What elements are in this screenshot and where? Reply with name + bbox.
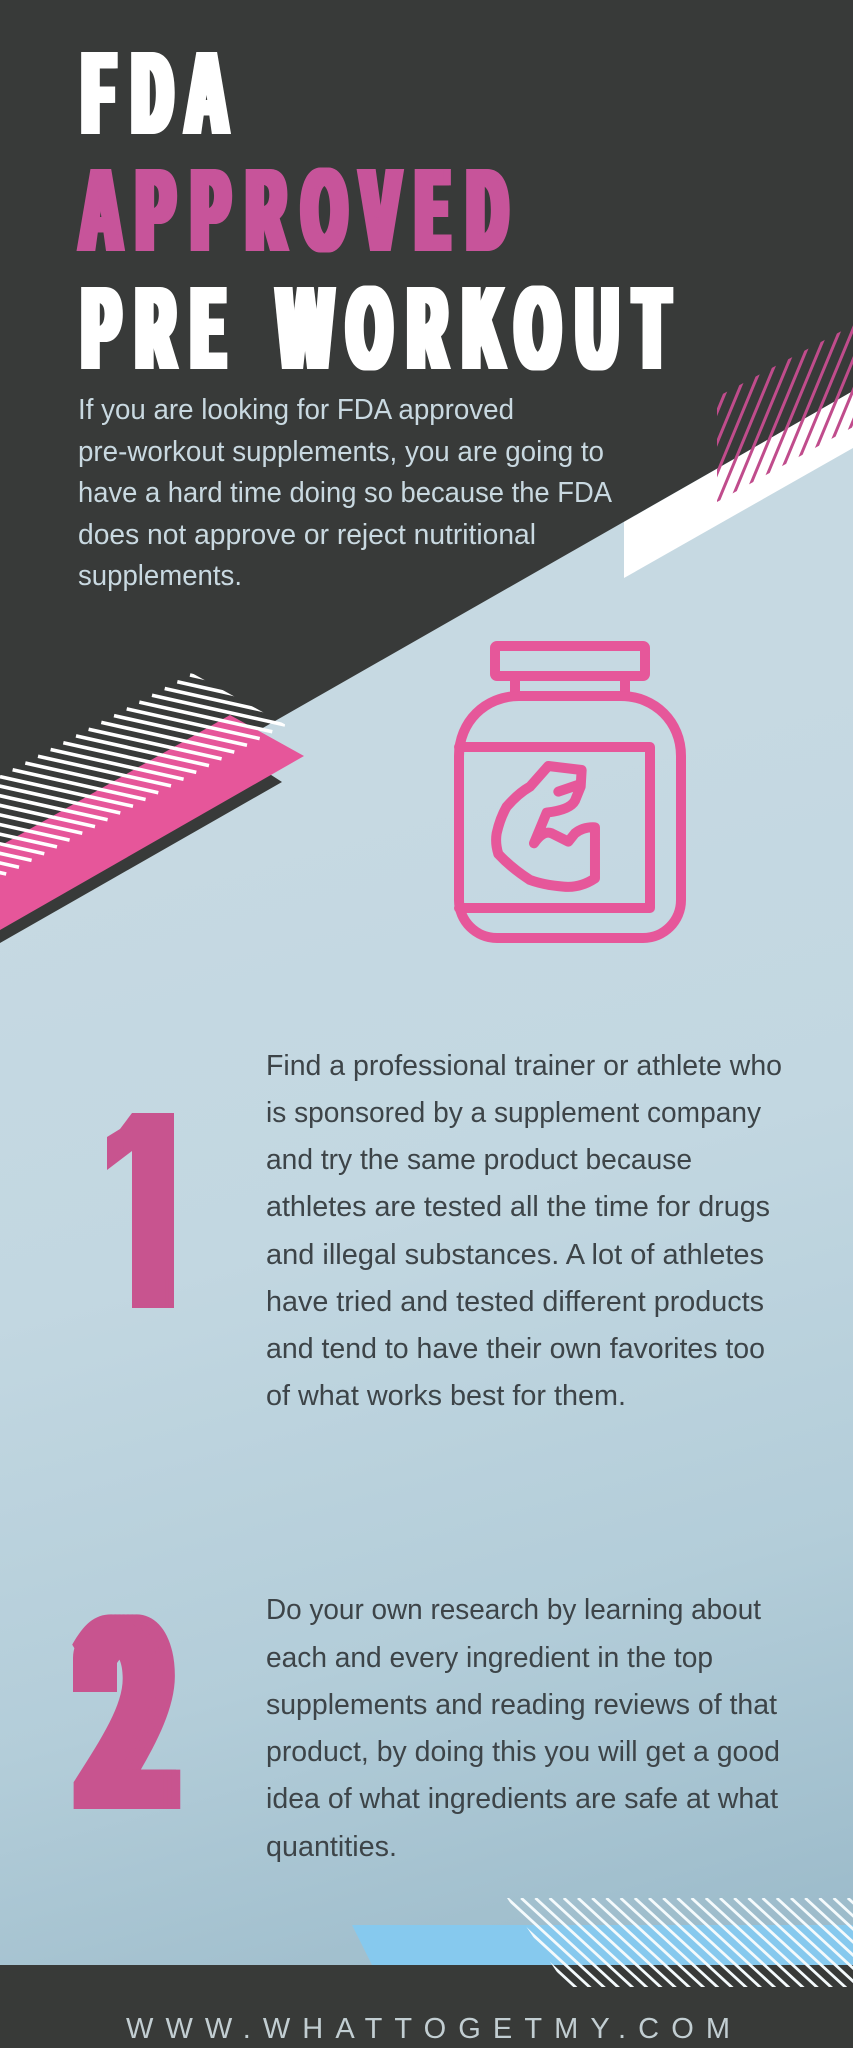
text block: step 1	[266, 1050, 782, 1412]
text block: step 2: supplements and reading reviews of that	[266, 1689, 777, 1721]
text block: step 2: Do your own research by learning about	[266, 1594, 761, 1626]
accent: blue strip bottom	[352, 1925, 853, 1965]
text block: step 1: and tend to have their own favorites too	[266, 1333, 765, 1365]
text block: step 1: of what works best for them.	[266, 1380, 626, 1412]
text block: step 1: is sponsored by a supplement company	[266, 1097, 761, 1129]
text block: step 2: idea of what ingredients are safe at what	[266, 1783, 778, 1815]
title line: APPROVED: APPROVED	[77, 123, 519, 283]
text block: intro paragraph	[78, 394, 613, 592]
text block: step 2: each and every ingredient in the top	[266, 1642, 713, 1674]
text block: step 1: and illegal substances. A lot of athletes	[266, 1239, 764, 1271]
panel: dark footer bar	[0, 1965, 853, 2048]
icon: supplement jar with flexed arm	[459, 646, 681, 938]
text block: intro paragraph: pre-workout supplements, you are going to	[78, 436, 604, 468]
number 2: 2	[67, 1504, 163, 1885]
accent: pink hatching top right	[717, 326, 853, 502]
accent: dark shadow band left	[0, 771, 282, 943]
accent: white hatching bottom right	[507, 1898, 853, 1987]
accent: white band top right	[624, 391, 853, 578]
text block: intro paragraph: does not approve or reject nutritional	[78, 519, 536, 551]
text block: step 2	[266, 1594, 780, 1863]
accent: white hatching left	[0, 675, 323, 874]
text block: intro paragraph: If you are looking for FDA approved	[78, 394, 514, 426]
text block: step 1: have tried and tested different products	[266, 1286, 764, 1318]
text block: step 2: product, by doing this you will get a good	[266, 1736, 780, 1768]
title line: PRE WORKOUT: PRE WORKOUT	[76, 241, 680, 401]
text: footer website: WWW.WHATTOGETMY.COM	[126, 2013, 730, 2045]
text block: intro paragraph: have a hard time doing so because the FDA	[78, 477, 613, 509]
text block: step 1: Find a professional trainer or athlete who	[266, 1050, 782, 1082]
text block: intro paragraph: supplements.	[78, 560, 242, 592]
text block: step 1: and try the same product because	[266, 1144, 692, 1176]
title line: FDA: FDA	[76, 6, 236, 166]
accent: pink band left	[0, 715, 304, 930]
text block: step 2: quantities.	[266, 1831, 397, 1863]
panel: dark diagonal header	[0, 0, 853, 878]
text block: step 1: athletes are tested all the time for drugs	[266, 1191, 770, 1223]
